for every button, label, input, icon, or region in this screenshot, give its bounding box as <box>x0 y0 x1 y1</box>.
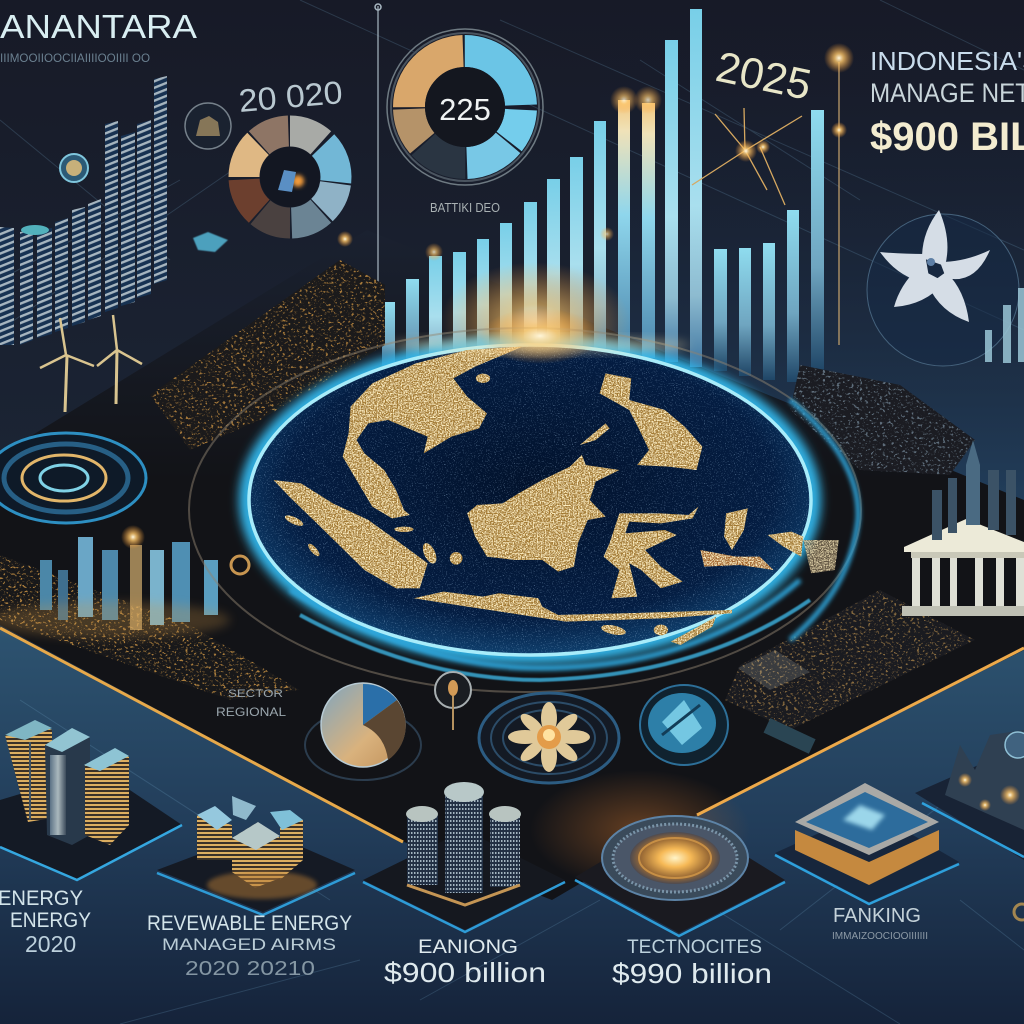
icon: temple building <box>902 519 1024 616</box>
title: ANANTARA <box>0 8 197 45</box>
gauge value: 225 <box>439 92 491 127</box>
icon: white orchid star in circle <box>867 210 1019 366</box>
upper vertical guide lines <box>375 4 839 345</box>
label: technocities 990 billion: TECTNOCITES <box>627 937 762 958</box>
platform: buildings left <box>0 720 182 880</box>
land: Sumatra <box>273 480 428 588</box>
year label: 20 020: 20 020 <box>237 74 344 119</box>
city skyline: left <box>0 525 249 638</box>
sunburst over horizon <box>480 308 600 364</box>
globe body <box>250 346 810 654</box>
platform: skyscrapers <box>363 782 565 932</box>
bar chart: central rising bars <box>382 9 824 382</box>
land: Timor <box>671 617 716 645</box>
tech band: circuit mosaic left <box>150 260 385 450</box>
tech band: circuit mosaic right <box>790 365 975 475</box>
land: Philippines <box>600 373 702 470</box>
land: Borneo <box>467 455 619 572</box>
dark central plate <box>0 230 1024 905</box>
label: renewable energy: REVEWABLE ENERGY <box>147 912 352 935</box>
small caption under gauge: BATTIKI DEO <box>430 200 500 215</box>
label: energy left: ENERGY <box>0 887 83 910</box>
label: banking 900 billion: $900 billion <box>384 957 546 988</box>
outer right arc <box>790 400 858 640</box>
tech band: circuit mosaic lower left <box>0 555 300 700</box>
land: Papua <box>768 532 803 557</box>
land: small islands <box>283 374 839 637</box>
label: fanking: FANKING <box>833 905 921 927</box>
land: Palawan <box>580 423 609 445</box>
label: renewable energy: MANAGED AIRMS <box>162 935 336 954</box>
label: renewable energy: 2020 20210 <box>185 958 315 980</box>
tech band: circuit mosaic lower right <box>725 590 975 730</box>
icon: ring medallion <box>185 103 231 149</box>
label: technocities 990 billion: $990 billion <box>612 958 772 989</box>
lower sweep rings <box>290 580 810 680</box>
label: renewable energy <box>147 912 352 980</box>
label: fanking: IMMAIZOOCIOOIIIIIII <box>832 931 928 942</box>
platform: blocks <box>157 796 355 915</box>
icon: glowing network nodes <box>337 43 854 261</box>
icon: blue emblem disc <box>640 685 728 765</box>
icon: small crystal <box>193 232 228 252</box>
label: banking 900 billion <box>384 937 546 988</box>
label: energy left: ENERGY <box>10 909 91 932</box>
globe with Indonesia map <box>189 308 861 692</box>
accent line: right gold edge <box>697 648 1024 815</box>
landmasses <box>273 347 839 645</box>
ring glow <box>247 344 813 656</box>
platform: right city <box>915 730 1024 860</box>
donut chart: 225 gauge <box>386 28 544 186</box>
land: Halmahera <box>724 508 748 550</box>
outer thin orbit ring <box>189 328 861 692</box>
donut chart: left <box>225 112 355 242</box>
icon: small globe badge <box>60 154 88 182</box>
label: banking 900 billion: EANIONG <box>418 937 518 958</box>
label: energy left <box>0 887 91 957</box>
icon: lotus flower plate <box>479 693 619 783</box>
land: Seram <box>700 550 774 570</box>
small caption: sector regional <box>216 688 286 719</box>
label: energy left: 2020 <box>25 931 76 957</box>
small caption: sector regional: SECTOR <box>228 688 283 700</box>
bar chart: right edge small bars <box>985 288 1024 363</box>
bar chart: left zebra bars <box>0 76 167 345</box>
icon: small device card <box>738 650 816 754</box>
bright ring <box>249 345 811 655</box>
icon: pin ring <box>435 672 471 730</box>
platform: chip <box>775 783 959 904</box>
small caption: sector regional: REGIONAL <box>216 705 286 719</box>
land: Sulawesi <box>604 507 698 598</box>
icon: small gold ornament <box>1014 904 1024 920</box>
accent line: left gold edge <box>0 628 403 842</box>
year label: 2025: 2025 <box>712 43 815 110</box>
icon: target rings <box>0 433 146 523</box>
icon: pie chart <box>305 683 421 780</box>
headline: Indonesia's managed <box>870 46 1024 159</box>
subtitle blurred line: IIIMOOIIOOCIIAIIIIOOIIII OO <box>0 51 150 65</box>
horizon glow behind bars <box>440 262 630 382</box>
platform: energy core <box>575 815 785 936</box>
label: fanking <box>832 905 928 942</box>
icon: wind turbines <box>40 315 142 412</box>
land: Indochina and Malay Peninsula <box>343 347 523 518</box>
floor: lower blue plane <box>0 628 1024 1024</box>
land: Java and Lesser Sunda <box>414 592 732 622</box>
label: technocities 990 billion <box>612 937 772 989</box>
city skyline: right spires <box>932 440 1016 540</box>
